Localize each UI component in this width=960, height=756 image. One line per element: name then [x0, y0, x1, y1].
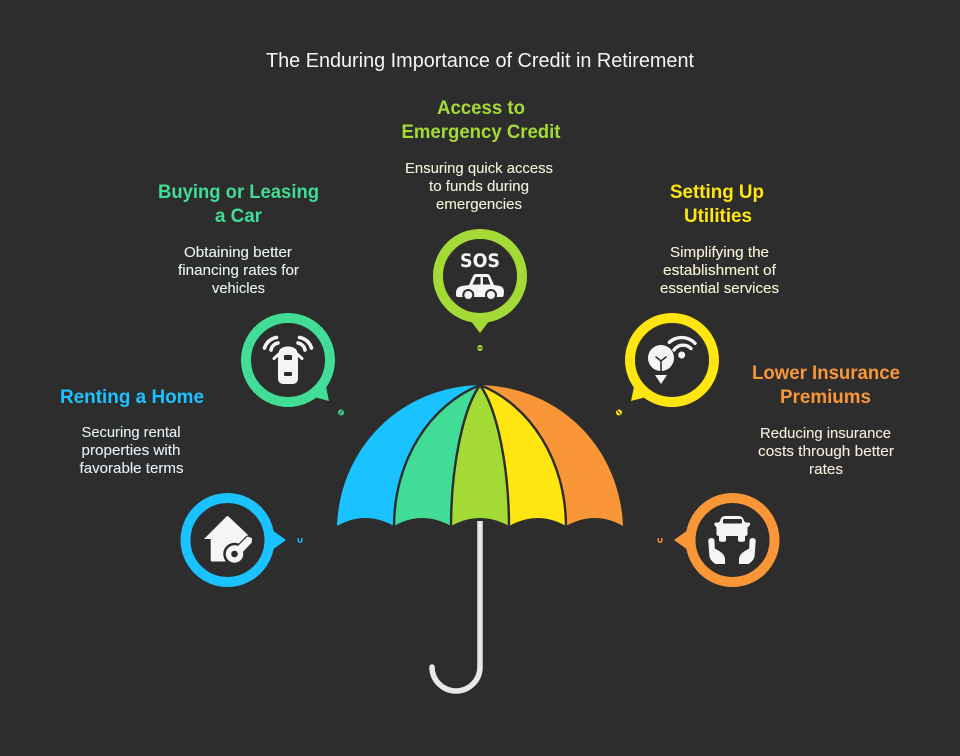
description [405, 161, 553, 213]
icon: car with signal [264, 338, 312, 384]
heading: Setting Up [670, 182, 764, 203]
description: properties with [82, 443, 180, 459]
umbrella panel: green [394, 385, 480, 526]
umbrella panel: lime [451, 385, 509, 526]
connector dot [298, 538, 302, 542]
description: vehicles [212, 281, 265, 297]
connector dot [616, 410, 622, 416]
heading: Renting a Home [60, 387, 204, 408]
icon: bulb with wifi [648, 338, 695, 384]
description [80, 425, 184, 477]
description: Simplifying the [670, 245, 769, 261]
heading: Utilities [684, 206, 752, 227]
bubble [674, 498, 774, 582]
umbrella ribs [394, 385, 566, 527]
connector dot [338, 410, 344, 416]
panel: access to emergency credit [402, 98, 561, 351]
heading: Emergency Credit [402, 122, 561, 143]
icon: SOS car: SOS [460, 250, 500, 272]
heading: a Car [215, 206, 263, 227]
panel: buying or leasing a car [158, 182, 344, 416]
description: rates [809, 462, 843, 478]
description: Securing rental [82, 425, 180, 441]
description: Ensuring quick access [405, 161, 553, 177]
heading [752, 363, 900, 408]
description: establishment of [663, 263, 777, 279]
umbrella [337, 385, 623, 691]
connector dot [476, 345, 484, 351]
panel: setting up utilities [616, 182, 779, 416]
umbrella handle [429, 521, 480, 691]
description [178, 245, 299, 297]
connector dot [658, 538, 662, 542]
description: to funds during [429, 179, 529, 195]
bubble [246, 318, 330, 402]
description: costs through better [758, 444, 894, 460]
description: Obtaining better [184, 245, 292, 261]
bubble [630, 318, 714, 402]
icon: hands protecting car [708, 516, 756, 564]
bubble [186, 498, 286, 582]
heading [158, 182, 319, 227]
description: essential services [660, 281, 779, 297]
panel: renting a home [60, 387, 302, 582]
bubble [438, 234, 522, 333]
icon: house and key [204, 516, 252, 564]
heading [670, 182, 764, 227]
heading: Access to [437, 98, 525, 119]
description: Reducing insurance [760, 426, 891, 442]
description: emergencies [436, 197, 522, 213]
heading: Buying or Leasing [158, 182, 319, 203]
description: favorable terms [80, 461, 184, 477]
description: financing rates for [178, 263, 299, 279]
heading: Premiums [780, 387, 871, 408]
title: The Enduring Importance of Credit in Retirement [266, 49, 694, 72]
heading [402, 98, 561, 143]
heading: Lower Insurance [752, 363, 900, 384]
description [660, 245, 779, 297]
umbrella panel: orange [480, 385, 623, 526]
panel: lower insurance premiums [658, 363, 900, 582]
umbrella panel: blue [337, 385, 480, 526]
description [758, 426, 894, 478]
umbrella panel: yellow [480, 385, 566, 526]
icon: SOS car [456, 250, 504, 300]
